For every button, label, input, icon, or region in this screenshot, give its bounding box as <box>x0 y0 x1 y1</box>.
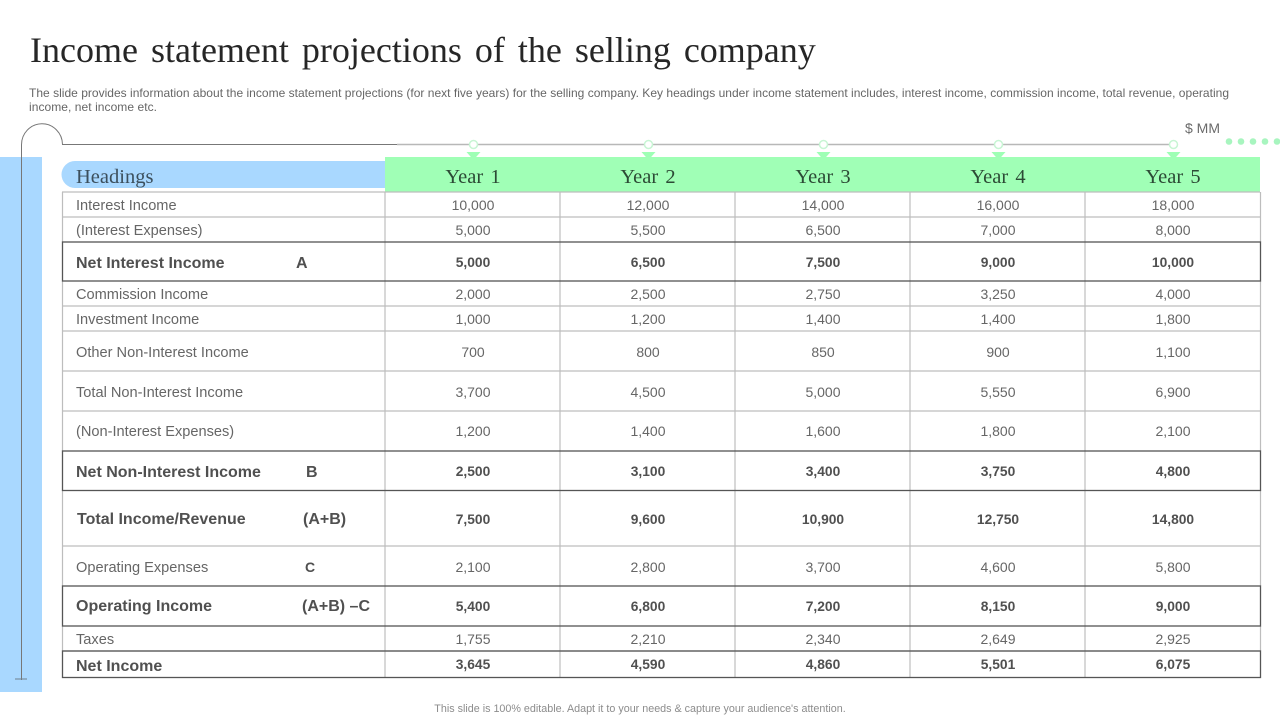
row: Net Income: 5,501 <box>981 657 1016 672</box>
row: Non-Interest Expenses: 1,800 <box>980 423 1016 439</box>
row: Interest Income: 12,000 <box>627 197 670 213</box>
row: Taxes: 2,210 <box>630 631 666 647</box>
description text: The slide provides information about the income statement projections (for next five years) for the selling company. Key headings under income statement includes, interest income, commission income, total revenue, operating <box>29 86 1229 100</box>
row: Total Non-Interest Income: 5,000 <box>805 384 841 400</box>
row: Net Interest Income: 7,500 <box>806 255 841 270</box>
row: Investment Income: 1,400 <box>980 311 1016 327</box>
row: Net Interest Income: 5,000 <box>456 255 491 270</box>
row: Investment Income <box>76 311 1191 328</box>
table header: years <box>385 157 1260 192</box>
row: Non-Interest Expenses: 1,600 <box>805 423 841 439</box>
row: Total Income/Revenue: 10,900 <box>802 512 844 527</box>
row: Taxes: 2,340 <box>805 631 841 647</box>
row: Net Non-Interest Income <box>76 464 1191 481</box>
row: Operating Expenses: Operating Expenses <box>76 560 208 576</box>
row: Operating Income: 8,150 <box>981 599 1016 614</box>
row: Interest Expenses <box>76 222 1191 239</box>
row: Interest Expenses: 7,000 <box>980 222 1016 238</box>
row: Operating Income: (A+B) –C <box>302 598 370 615</box>
row: Interest Income: Interest Income <box>76 198 177 214</box>
row: Interest Income: 18,000 <box>1152 197 1195 213</box>
row: Net Interest Income: A <box>296 255 308 272</box>
row: Net Non-Interest Income: 3,750 <box>981 464 1016 479</box>
timeline connector line <box>15 124 1174 680</box>
row: Commission Income: 2,750 <box>805 286 841 302</box>
footer note: This slide is 100% editable. Adapt it to your needs & capture your audience's attention. <box>434 703 846 715</box>
row: Operating Expenses: 2,800 <box>630 559 666 575</box>
row: Operating Income: 6,800 <box>631 599 666 614</box>
row: Investment Income: 1,800 <box>1155 311 1191 327</box>
row: Interest Expenses: 8,000 <box>1155 222 1191 238</box>
row: Commission Income: Commission Income <box>76 287 208 303</box>
row: Total Income/Revenue: (A+B) <box>303 511 346 528</box>
row: Non-Interest Expenses: 1,200 <box>455 423 491 439</box>
row: Commission Income: 4,000 <box>1155 286 1191 302</box>
table header: headings: Headings <box>76 166 153 188</box>
row: Operating Expenses: 4,600 <box>980 559 1016 575</box>
decorative dots <box>1226 138 1280 145</box>
table header: years: Year 1 <box>445 166 501 188</box>
table header: years: Year 3 <box>795 166 851 188</box>
row: Net Non-Interest Income: 3,100 <box>631 464 666 479</box>
row: Other Non-Interest Income: Other Non-Interest Income <box>76 345 249 361</box>
table header: years: Year 5 <box>1145 166 1201 188</box>
row: Taxes: 2,925 <box>1155 631 1191 647</box>
row: Non-Interest Expenses <box>76 423 1191 440</box>
row: Interest Income: 16,000 <box>977 197 1020 213</box>
row: Total Income/Revenue: 12,750 <box>977 512 1019 527</box>
row: Investment Income: 1,000 <box>455 311 491 327</box>
row: Operating Expenses: C <box>305 559 315 575</box>
row: Total Non-Interest Income: 5,550 <box>980 384 1016 400</box>
row: Operating Income: 9,000 <box>1156 599 1191 614</box>
table header: headings <box>62 161 386 188</box>
row: Total Income/Revenue: Total Income/Revenue <box>77 511 246 528</box>
table header: years: Year 2 <box>620 166 676 188</box>
row: Net Interest Income: 10,000 <box>1152 255 1194 270</box>
row: Total Non-Interest Income: 3,700 <box>455 384 491 400</box>
row: Net Non-Interest Income: B <box>306 464 318 481</box>
row: Other Non-Interest Income: 900 <box>986 344 1010 360</box>
row: Other Non-Interest Income: 700 <box>461 344 485 360</box>
row: Interest Expenses: 6,500 <box>805 222 841 238</box>
row: Operating Income: 7,200 <box>806 599 841 614</box>
row: Taxes: Taxes <box>76 632 114 648</box>
row: Commission Income: 2,500 <box>630 286 666 302</box>
row: Total Non-Interest Income: 4,500 <box>630 384 666 400</box>
row: Total Income/Revenue: 7,500 <box>456 512 491 527</box>
row: Total Non-Interest Income <box>76 384 1191 401</box>
row: Operating Expenses: 2,100 <box>455 559 491 575</box>
left blue side bar <box>0 157 42 692</box>
row: Operating Income: 5,400 <box>456 599 491 614</box>
row: Total Income/Revenue: 14,800 <box>1152 512 1194 527</box>
row: Operating Expenses: 5,800 <box>1155 559 1191 575</box>
row: Net Income: 3,645 <box>456 657 491 672</box>
row: Taxes: 1,755 <box>455 631 491 647</box>
row: Net Interest Income: Net Interest Income <box>76 255 225 272</box>
row: Interest Expenses: 5,500 <box>630 222 666 238</box>
row: Operating Income: Operating Income <box>76 598 212 615</box>
row: Net Income: 4,590 <box>631 657 666 672</box>
row: Investment Income: 1,200 <box>630 311 666 327</box>
row: Net Interest Income: 6,500 <box>631 255 666 270</box>
row: Investment Income: Investment Income <box>76 312 199 328</box>
year markers <box>466 140 1180 160</box>
row: Non-Interest Expenses: 1,400 <box>630 423 666 439</box>
row: Net Non-Interest Income: Net Non-Interest Income <box>76 464 261 481</box>
row: Other Non-Interest Income: 850 <box>811 344 835 360</box>
row: Commission Income: 2,000 <box>455 286 491 302</box>
row: Commission Income: 3,250 <box>980 286 1016 302</box>
row: Net Income: 6,075 <box>1156 657 1191 672</box>
row: Commission Income <box>76 286 1191 303</box>
table grid <box>62 192 1260 678</box>
row: Other Non-Interest Income: 1,100 <box>1155 344 1191 360</box>
row: Net Income: 4,860 <box>806 657 841 672</box>
row: Interest Income: 10,000 <box>452 197 495 213</box>
row: Operating Income <box>76 598 1191 615</box>
description text: income, net income etc. <box>29 100 157 114</box>
row: Total Non-Interest Income: 6,900 <box>1155 384 1191 400</box>
row: Net Non-Interest Income: 2,500 <box>456 464 491 479</box>
row: Operating Expenses <box>76 559 1191 576</box>
row: Net Interest Income: 9,000 <box>981 255 1016 270</box>
row: Total Non-Interest Income: Total Non-Interest Income <box>76 385 243 401</box>
row: Taxes: 2,649 <box>980 631 1016 647</box>
unit label: $ MM <box>1185 120 1220 136</box>
row: Other Non-Interest Income: 800 <box>636 344 660 360</box>
row: Interest Expenses: 5,000 <box>455 222 491 238</box>
row: Non-Interest Expenses: 2,100 <box>1155 423 1191 439</box>
row: Non-Interest Expenses: (Non-Interest Expenses) <box>76 424 234 440</box>
row: Interest Expenses: (Interest Expenses) <box>76 223 203 239</box>
row: Total Income/Revenue <box>77 511 1194 528</box>
row: Interest Income: 14,000 <box>802 197 845 213</box>
row: Taxes <box>76 631 1191 648</box>
row: Interest Income <box>76 197 1195 214</box>
row: Net Non-Interest Income: 4,800 <box>1156 464 1191 479</box>
title: Income statement projections of the selling company <box>30 30 816 70</box>
description text <box>29 86 1229 114</box>
row: Other Non-Interest Income <box>76 344 1191 361</box>
row: Net Non-Interest Income: 3,400 <box>806 464 841 479</box>
row: Net Interest Income <box>76 255 1194 272</box>
table header: years: Year 4 <box>970 166 1026 188</box>
row: Operating Expenses: 3,700 <box>805 559 841 575</box>
row: Net Income <box>76 657 1191 675</box>
row: Net Income: Net Income <box>76 658 162 675</box>
row: Total Income/Revenue: 9,600 <box>631 512 666 527</box>
row: Investment Income: 1,400 <box>805 311 841 327</box>
